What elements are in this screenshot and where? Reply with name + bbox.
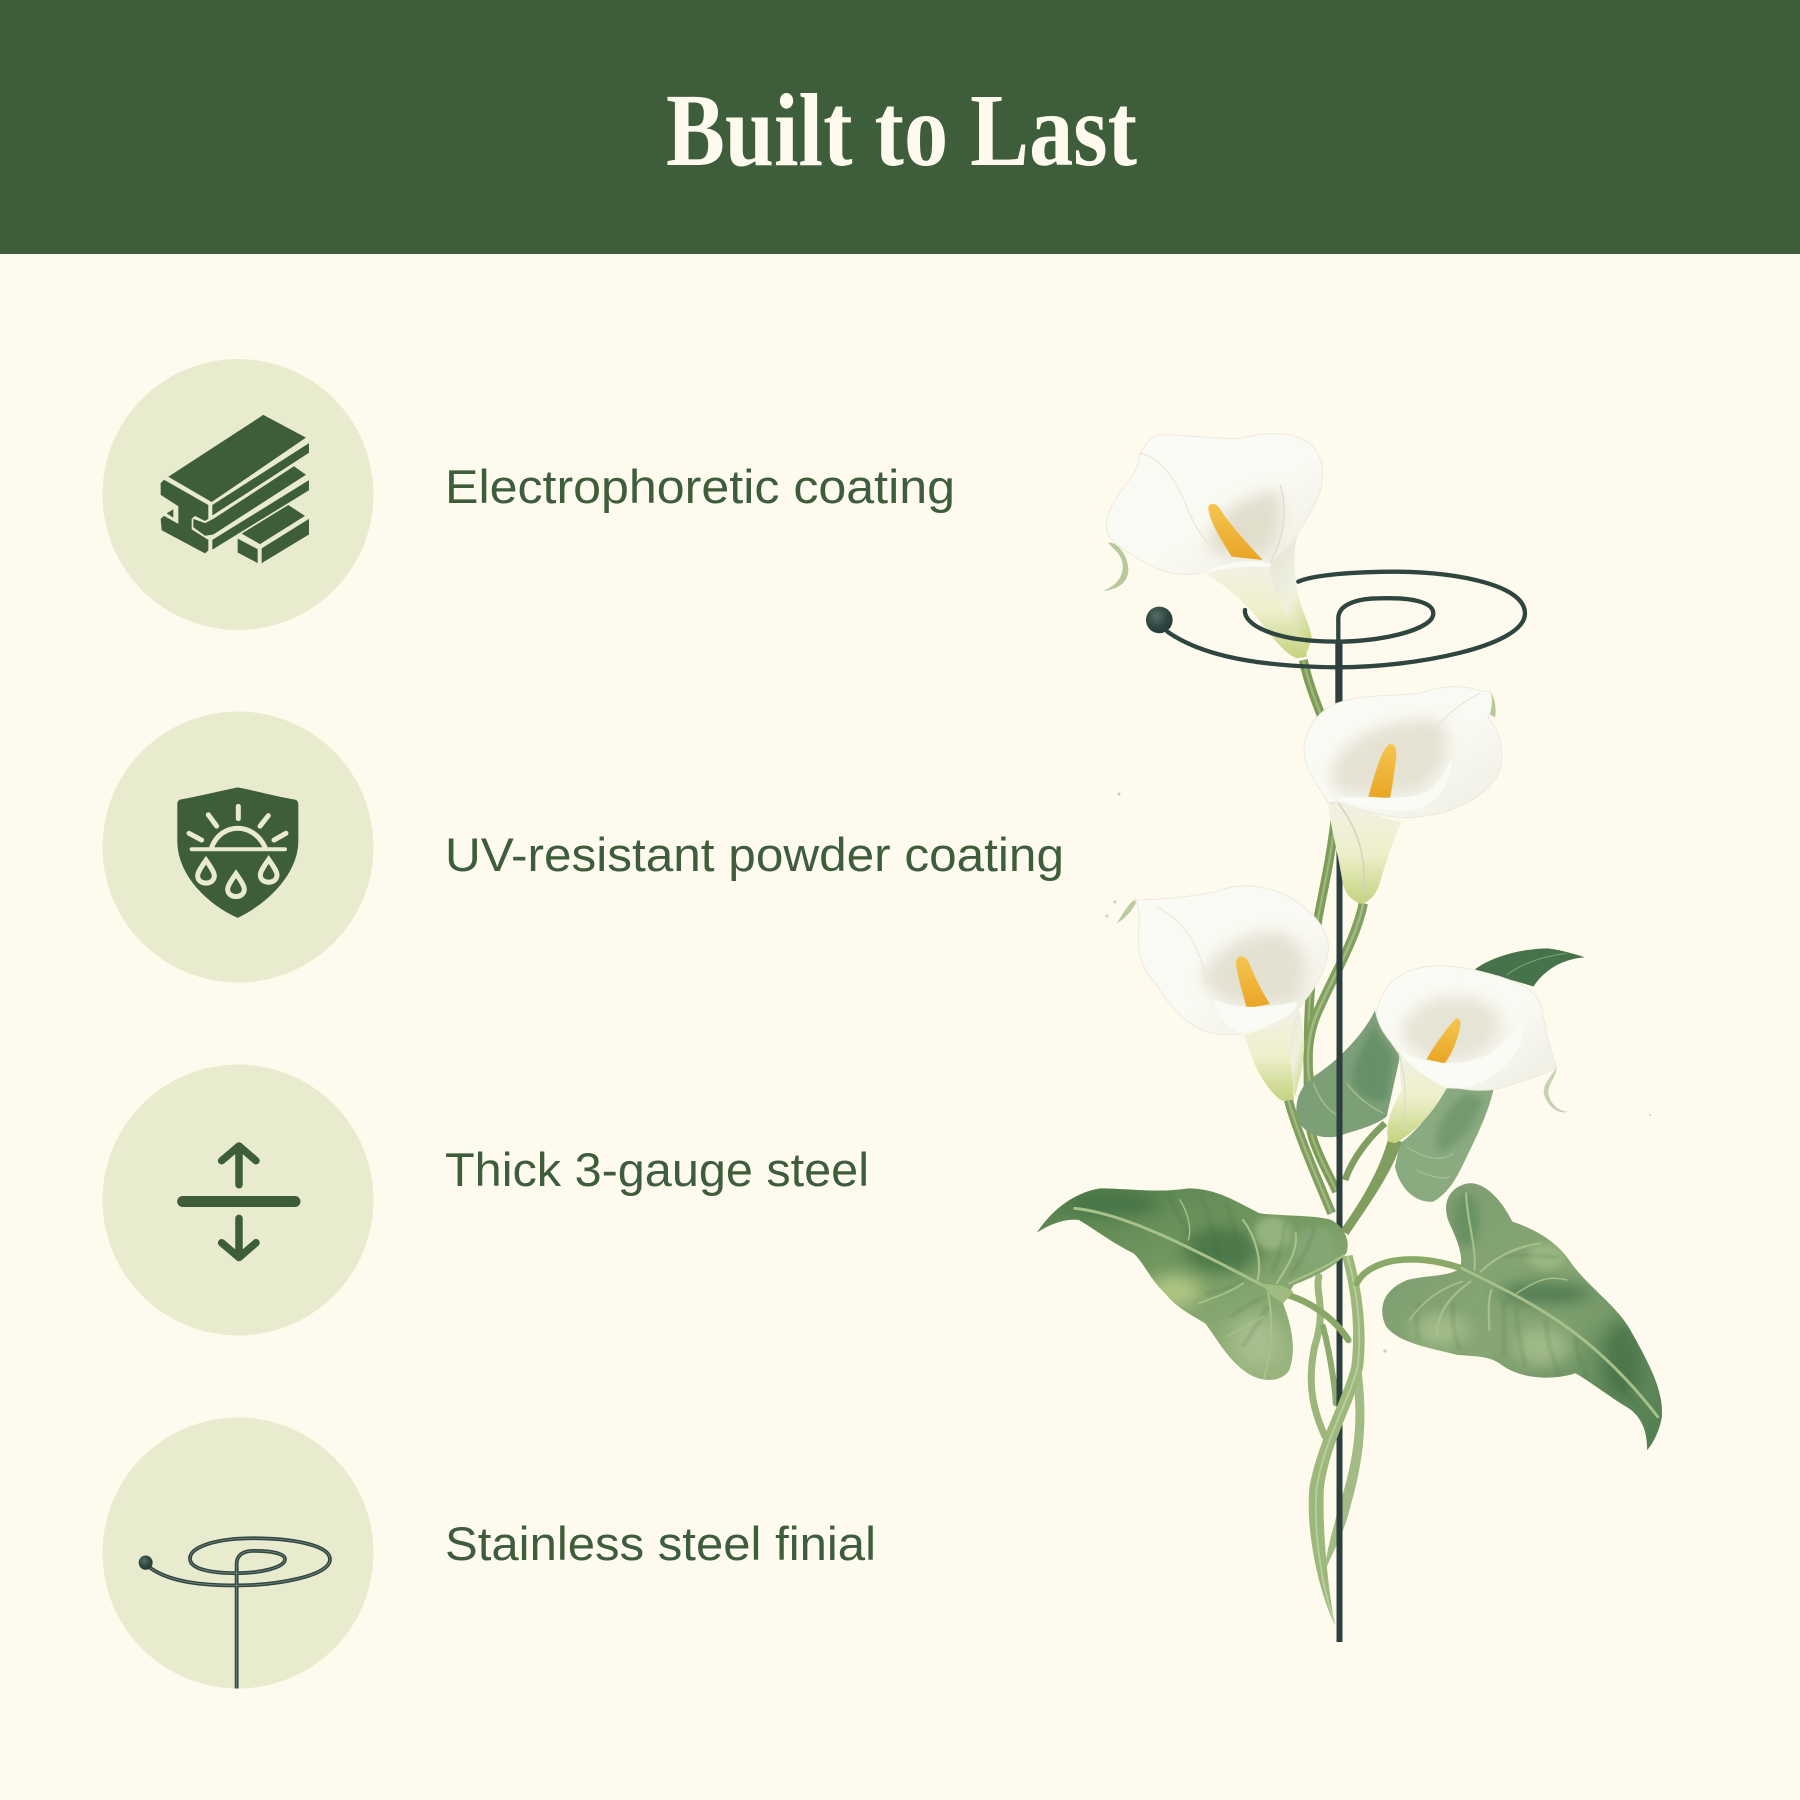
paint specks bbox=[1106, 792, 1651, 1353]
spiral support bbox=[1146, 572, 1525, 703]
label: UV-resistant powder coating bbox=[445, 828, 1064, 881]
icon circle: steel beams bbox=[102, 359, 374, 630]
stems upper bbox=[1288, 903, 1385, 1213]
right leaf bbox=[1382, 1183, 1662, 1450]
label: Stainless steel finial bbox=[445, 1517, 876, 1570]
lily: second flower bbox=[1304, 687, 1502, 904]
lily: top flower bbox=[1103, 434, 1323, 658]
illustration: calla lilies on spiral plant support bbox=[1037, 434, 1662, 1642]
icon: spiral finial bbox=[139, 1538, 330, 1689]
lily: fourth flower bbox=[1341, 966, 1568, 1235]
title: Built to Last bbox=[666, 73, 1137, 188]
icon circle: shield bbox=[102, 712, 374, 982]
icon circle: finial bbox=[102, 1418, 374, 1689]
label: Electrophoretic coating bbox=[445, 460, 955, 513]
icon: steel beams bbox=[161, 415, 309, 563]
icon: arrows and bar bbox=[183, 1146, 295, 1258]
feature row: UV-resistant powder coating bbox=[102, 712, 1064, 982]
feature row: thick 3-gauge steel bbox=[102, 1064, 869, 1336]
feature row: stainless steel finial bbox=[102, 1418, 876, 1689]
back leaves bbox=[1296, 948, 1585, 1202]
icon circle: gauge arrows bbox=[102, 1064, 374, 1336]
feature row: electrophoretic coating bbox=[102, 359, 955, 630]
header band bbox=[0, 0, 1800, 254]
stem of top flower bbox=[1303, 660, 1337, 1192]
stems front twist bbox=[1281, 1255, 1470, 1625]
icon: shield with sun and drops bbox=[177, 787, 298, 918]
stems lower twist bbox=[1311, 1277, 1364, 1573]
left leaf bbox=[1037, 1188, 1348, 1380]
label: Thick 3-gauge steel bbox=[445, 1143, 869, 1196]
lily: third flower bbox=[1117, 886, 1328, 1101]
metal pole bbox=[1336, 640, 1342, 1642]
